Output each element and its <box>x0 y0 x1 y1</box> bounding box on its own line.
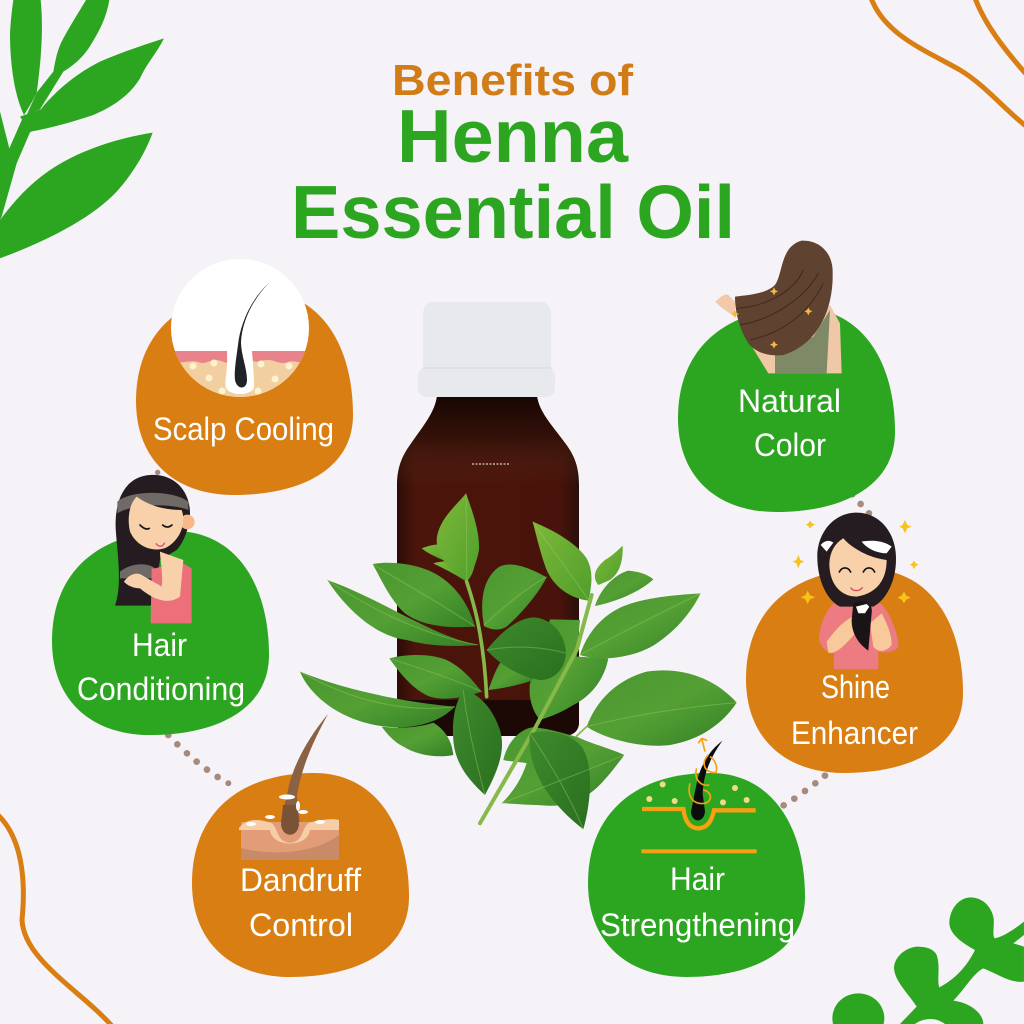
label: Hair Conditioning: Hair <box>132 627 187 663</box>
top shoot leaves <box>422 544 450 563</box>
icon: woman conditioning hair <box>115 475 195 623</box>
stems <box>467 582 592 823</box>
panel: shine enhancer <box>746 513 963 773</box>
blob <box>192 773 409 977</box>
title line: Benefits of: Benefits of <box>392 56 633 105</box>
title line: Essential Oil: Essential Oil <box>291 170 735 254</box>
label: Dandruff Control: Control <box>249 907 353 943</box>
icon: hair follicle in scalp <box>165 259 315 400</box>
panel: natural color <box>678 241 895 512</box>
blob <box>746 569 963 773</box>
blob <box>136 291 353 495</box>
panel: scalp cooling <box>136 259 353 495</box>
bottle <box>397 302 579 736</box>
label: Natural Color: Natural <box>738 383 841 419</box>
panel: hair conditioning <box>52 475 269 735</box>
henna leaves sprig <box>300 493 737 829</box>
label: Natural Color: Color <box>754 427 826 463</box>
connector dots: strengthening to shine <box>780 772 828 809</box>
connector dots: conditioning to dandruff <box>155 470 231 786</box>
panel: hair strengthening <box>588 738 805 977</box>
label: Scalp Cooling: Scalp Cooling <box>153 411 334 447</box>
decoration: top-left green leaves <box>0 0 164 258</box>
midribs <box>300 493 737 829</box>
icon: strong hair strand <box>641 738 757 853</box>
label: Hair Conditioning: Conditioning <box>77 671 245 707</box>
icon: smiling girl with shiny hair <box>793 513 919 669</box>
connector dots: color to shine <box>849 491 872 517</box>
panel: dandruff control <box>192 714 409 977</box>
icon: hair follicle with dandruff <box>239 714 339 860</box>
decoration: bottom-left orange curve <box>0 815 112 1024</box>
label: Shine Enhancer: Shine <box>821 669 890 705</box>
blob <box>678 308 895 512</box>
icon: woman with long brown hair <box>715 241 842 373</box>
bottle body <box>397 396 579 736</box>
blob <box>52 531 269 735</box>
title line: Henna: Henna <box>397 94 629 178</box>
bottle cap <box>418 302 555 397</box>
blob <box>588 773 805 977</box>
decoration: top-right orange curves <box>871 0 1024 126</box>
back leaves <box>530 619 608 720</box>
label: Hair Strengthening: Hair <box>670 861 725 897</box>
label: Hair Strengthening: Strengthening <box>600 907 795 943</box>
label: Shine Enhancer: Enhancer <box>791 715 918 751</box>
title <box>291 56 735 254</box>
main leaves <box>327 580 478 646</box>
decoration: bottom-right green sprig <box>832 897 1024 1024</box>
label: Dandruff Control: Dandruff <box>240 862 361 898</box>
